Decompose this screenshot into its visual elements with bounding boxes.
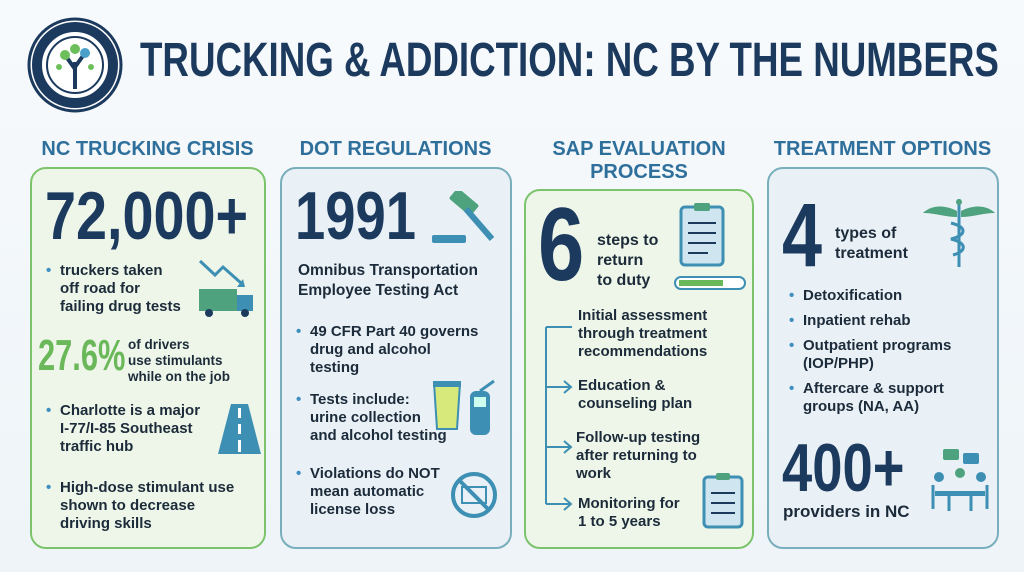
text: tests include: urine collection [310, 409, 421, 426]
text: Charlotte: Charlotte is a major [60, 402, 200, 419]
text: tests include: and alcohol testing [310, 427, 447, 444]
text: high-dose [46, 479, 234, 532]
text: truckers: truckers taken [60, 262, 163, 279]
panel: NC trucking crisis [30, 167, 266, 549]
text: high-dose: shown to decrease [60, 497, 195, 514]
heading: SAP evaluation process [552, 138, 726, 183]
text: stimulants [128, 337, 230, 384]
icon: no license [451, 472, 497, 518]
big number 72,000+: 72,000+ [45, 178, 248, 254]
text: violations: license loss [310, 501, 395, 518]
text: tests include: Tests include: [310, 391, 410, 408]
text: stimulants: while on the job [128, 369, 230, 384]
text: violations: Violations do NOT [310, 465, 440, 482]
text: types of treatment [835, 225, 908, 262]
list: treatment types: Inpatient rehab [803, 312, 911, 329]
list: treatment types [790, 287, 951, 415]
big number 6: 6 [538, 187, 584, 303]
icon: caduceus [923, 199, 995, 267]
icon: truck with down arrow [199, 260, 253, 317]
text: 49 CFR: drug and alcohol [310, 341, 431, 358]
heading: SAP evaluation process: SAP EVALUATION [552, 138, 726, 160]
title: TRUCKING & ADDICTION: NC BY THE NUMBERS [140, 34, 999, 87]
text: truckers: failing drug tests [60, 298, 181, 315]
step 4: Monitoring for [578, 495, 680, 512]
list: treatment types: groups (NA, AA) [803, 398, 919, 415]
step 1: Initial assessment [578, 307, 707, 324]
text: stimulants: use stimulants [128, 353, 223, 368]
panel: SAP evaluation [524, 189, 754, 549]
text: steps to return: return [597, 252, 643, 269]
list: treatment types: Aftercare & support [803, 380, 944, 397]
step 1: recommendations [578, 343, 707, 360]
heading: NC trucking crisis: NC TRUCKING CRISIS [41, 138, 254, 160]
big number 1991: 1991 [295, 178, 416, 254]
icon: highway [218, 404, 261, 454]
logo [28, 18, 122, 112]
text: steps to return: to duty [597, 272, 650, 289]
text: Charlotte [46, 402, 200, 455]
text: steps to return: steps to [597, 232, 658, 249]
step 2: Education & [578, 377, 666, 394]
text: truckers: off road for [60, 280, 140, 297]
big number 4: 4 [782, 186, 822, 286]
list: treatment types: Detoxification [803, 287, 902, 304]
text: Omnibus act: Employee Testing Act [298, 282, 458, 299]
text: steps to return [597, 232, 658, 289]
big number 27.6%: 27.6% [38, 331, 125, 380]
heading: SAP evaluation process: PROCESS [590, 161, 688, 183]
text: 49 CFR [296, 323, 478, 376]
step 2: counseling plan [578, 395, 692, 412]
list: treatment types: Outpatient programs [803, 337, 951, 354]
step 3: work [576, 465, 611, 482]
text: providers: providers in NC [783, 502, 910, 521]
step 2 [578, 377, 692, 412]
text: high-dose: High-dose stimulant use [60, 479, 234, 496]
text: violations [296, 465, 440, 518]
step 4 [578, 495, 680, 530]
panel: DOT regulations [280, 167, 512, 549]
process steps [545, 307, 708, 530]
panel: treatment options [767, 167, 999, 549]
icon: clipboard with progress bar [674, 203, 746, 290]
text: high-dose: driving skills [60, 515, 152, 532]
step 1 [578, 307, 708, 360]
icon: clipboard [702, 473, 744, 528]
icon: support group [932, 449, 988, 511]
icon: gavel [432, 191, 494, 243]
text: 49 CFR: 49 CFR Part 40 governs [310, 323, 478, 340]
step 3: Follow-up testing [576, 429, 700, 446]
icon: test cup and breathalyzer [432, 380, 495, 435]
text: Charlotte: I-77/I-85 Southeast [60, 420, 193, 437]
step 4: 1 to 5 years [578, 513, 661, 530]
text: violations: mean automatic [310, 483, 424, 500]
text: 49 CFR: testing [310, 359, 359, 376]
text: Omnibus act: Omnibus Transportation [298, 262, 478, 279]
step 1: through treatment [578, 325, 707, 342]
step 3 [576, 429, 700, 482]
heading: DOT regulations: DOT REGULATIONS [300, 138, 491, 160]
text: tests include [296, 391, 447, 444]
text: stimulants: of drivers [128, 337, 190, 352]
list: treatment types: (IOP/PHP) [803, 355, 874, 372]
big number 400+: 400+ [782, 430, 905, 506]
text: Charlotte: traffic hub [60, 438, 133, 455]
step 3: after returning to [576, 447, 697, 464]
text: types of treatment: types of [835, 225, 896, 242]
heading: treatment options: TREATMENT OPTIONS [774, 138, 991, 160]
text: Omnibus act [298, 262, 478, 299]
text: types of treatment: treatment [835, 245, 908, 262]
text: truckers [46, 262, 181, 315]
